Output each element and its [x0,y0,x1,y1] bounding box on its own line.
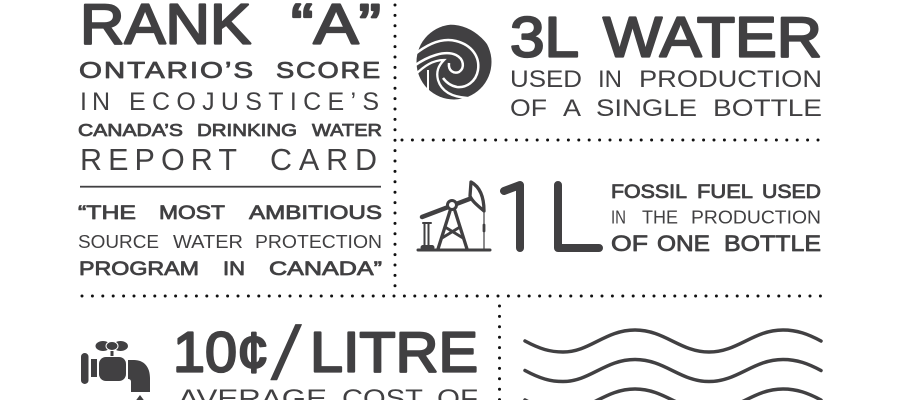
heading: 3L water: 3L [510,6,579,70]
panel: rank A [78,0,382,280]
big number 1L [504,185,599,248]
text: in the production: IN [611,206,626,228]
heading: 10¢/litre: / [268,313,304,396]
heading: 10¢/litre: 10¢ [173,320,269,384]
text: used in production: IN [598,66,622,93]
quote line 3 [79,258,382,280]
text: fossil fuel used: USED [762,182,821,203]
quote line 2: WATER [173,231,243,252]
text: of one bottle: BOTTLE [724,231,821,256]
text: in the production [611,206,821,228]
text: Ontario's score [79,57,382,83]
text: report card: CARD [270,143,377,177]
quote line 1 [78,202,382,224]
quote line 1: AMBITIOUS [249,202,382,224]
text: of a single bottle: A [563,95,582,122]
text: Ontario's score: ONTARIO’S [79,57,255,83]
quote line 3: PROGRAM [79,258,199,280]
quote line 1: MOST [159,202,225,224]
text: used in production: PRODUCTION [639,66,822,93]
text: of one bottle: OF [611,231,648,256]
heading: 10¢/litre: LITRE [310,320,478,384]
heading: 3L water: WATER [603,6,822,70]
text: in Ecojustice's: IN [80,88,110,116]
text: of a single bottle [510,95,822,122]
icon: waves [525,330,821,400]
panel: 1L fossil fuel [504,182,821,256]
panel: 3L water [510,6,822,122]
heading: rank A [80,0,381,56]
heading: 10¢/litre [173,313,478,396]
text: in the production: THE [642,206,678,228]
divider rule [80,186,381,188]
text: of a single bottle: OF [510,95,547,122]
text: of one bottle: ONE [657,231,710,256]
text: of a single bottle: BOTTLE [713,95,822,122]
text: fossil fuel used: FUEL [697,182,753,203]
text: in Ecojustice's: ECOJUSTICE’S [129,88,379,116]
quote line 1: “THE [78,202,136,224]
text: Canada's drinking water: CANADA’S [78,120,183,140]
icon: water swirl [414,23,492,99]
heading: 3L water [510,6,822,70]
text: in the production: PRODUCTION [691,206,821,228]
quote line 2 [78,231,382,252]
text: fossil fuel used [611,182,821,203]
panel: 10 cents per litre [173,313,478,400]
icon: faucet [81,341,150,400]
text: Ontario's score: SCORE [276,57,382,83]
quote line 2: SOURCE [78,231,159,252]
icon: oil pump [418,182,490,250]
text: report card: REPORT [80,143,237,177]
text: Canada's drinking water [78,120,382,140]
quote line 3: CANADA” [269,258,382,280]
quote line 2: PROTECTION [255,231,382,252]
text: report card [80,143,377,177]
quote line 3: IN [223,258,245,280]
text: average cost of [178,385,478,400]
text: used in production [510,66,822,93]
text: of one bottle [611,231,821,256]
text: fossil fuel used: FOSSIL [611,182,687,203]
text: Canada's drinking water: WATER [312,120,382,140]
text: used in production: USED [510,66,582,93]
text: Canada's drinking water: DRINKING [197,120,297,140]
text: of a single bottle: SINGLE [596,95,697,122]
